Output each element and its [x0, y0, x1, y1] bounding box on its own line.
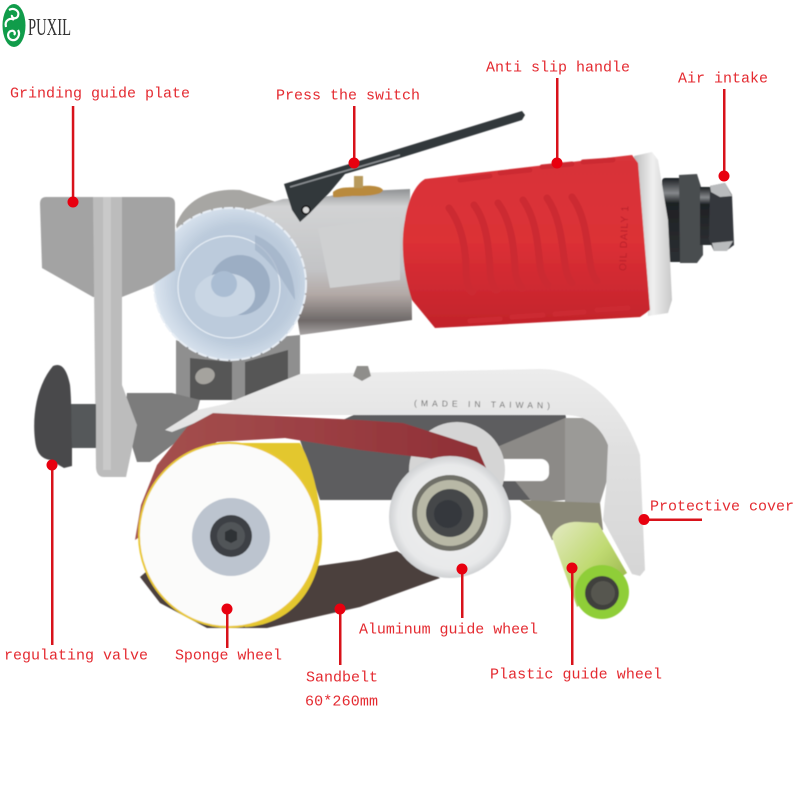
yellow rim	[220, 443, 322, 627]
callout: Air intake	[678, 70, 768, 182]
connector collar	[679, 174, 703, 263]
white-blue adjustment knob	[154, 208, 306, 360]
callout: Sponge wheel: Sponge wheel	[175, 648, 282, 664]
brass switch screw	[333, 176, 383, 197]
callout: Sandbelt 60*260mm: 60*260mm	[305, 694, 378, 710]
dark mechanism block	[300, 412, 570, 500]
upper sanding belt	[135, 413, 487, 540]
callout: Protective cover: Protective cover	[650, 498, 794, 516]
connector barrel	[662, 178, 684, 262]
valve shaft	[70, 404, 96, 448]
red anti slip handle	[403, 155, 650, 328]
callout: regulating valve	[4, 460, 148, 664]
callout: Sandbelt 60*260mm: Sandbelt	[306, 670, 378, 686]
grinding guide plate	[40, 197, 175, 477]
callout: Anti slip handle: Anti slip handle	[486, 60, 630, 76]
knob center boss	[211, 271, 237, 297]
connector nut	[709, 183, 734, 251]
aluminum guide wheel	[389, 456, 511, 578]
rear pulley behind knob	[176, 190, 285, 260]
callout: Aluminum guide wheel: Aluminum guide wheel	[359, 622, 538, 638]
callout: Aluminum guide wheel	[359, 564, 538, 638]
hub bolt	[210, 515, 252, 557]
bolt hex socket	[225, 529, 237, 543]
callout: Anti slip handle	[486, 60, 630, 168]
connector neck	[700, 187, 712, 245]
roller face	[575, 565, 629, 619]
cover screw	[353, 366, 371, 381]
callout: Plastic guide wheel	[490, 562, 662, 684]
callout: Press the switch	[276, 88, 420, 168]
plate wings	[40, 197, 175, 297]
callout: Plastic guide wheel: Plastic guide wheel	[490, 666, 662, 684]
plastic guide wheel	[552, 522, 629, 619]
hinge block	[565, 418, 608, 503]
callout: regulating valve: regulating valve	[4, 648, 148, 664]
mechanism slot	[493, 459, 549, 481]
lower belt run	[140, 551, 440, 628]
lever pivot	[302, 206, 310, 214]
air intake connector	[662, 174, 734, 263]
handle grip	[403, 155, 650, 328]
icon: green swirl emblem	[2, 4, 26, 47]
stainless protective cover	[165, 366, 645, 576]
knob swirl	[210, 255, 270, 315]
silver end flange	[634, 152, 672, 316]
sponge wheel	[139, 443, 322, 627]
lower mount link	[124, 393, 200, 462]
callout: Sandbelt 60*260mm	[305, 604, 378, 710]
valve handle	[34, 365, 72, 468]
white foam face	[139, 443, 319, 627]
bracket inner dark	[190, 350, 288, 400]
callout: Sponge wheel	[175, 604, 282, 664]
trigger lever	[284, 111, 525, 222]
callout: Protective cover	[638, 498, 794, 525]
aluminium motor housing	[246, 189, 412, 335]
rear guide wheel	[409, 422, 505, 518]
mechanism light plate	[490, 418, 565, 503]
wheel disc	[389, 456, 511, 578]
plate stem	[93, 197, 137, 477]
callout: Air intake: Air intake	[678, 70, 768, 88]
brand name: PUXIL	[28, 15, 71, 41]
wheel bearing	[412, 475, 488, 551]
roller bolt	[585, 576, 619, 610]
handle ribs	[449, 160, 628, 321]
cover plate and side	[165, 369, 645, 576]
knob disc	[154, 208, 306, 360]
knob inner ring	[178, 236, 280, 338]
grey hub	[192, 498, 270, 576]
logo: PUXIL brand	[2, 4, 71, 47]
sander illustration	[34, 111, 734, 628]
wheel axle	[434, 500, 462, 528]
adjusting screw	[193, 365, 217, 387]
knob shadow blotches	[255, 235, 295, 300]
callout: Grinding guide plate: Grinding guide plate	[10, 86, 190, 102]
molded text on cover: (MADE IN TAIWAN)	[414, 398, 550, 410]
callout: Press the switch: Press the switch	[276, 88, 420, 104]
regulating valve knob	[34, 365, 96, 468]
lever arm	[284, 111, 525, 222]
housing recess	[318, 217, 400, 288]
lower arm	[520, 500, 603, 540]
rear support bracket	[176, 335, 300, 400]
callout: Grinding guide plate	[10, 86, 190, 208]
molded text on handle: OIL DAILY 1	[618, 205, 631, 271]
roller body	[552, 522, 627, 607]
